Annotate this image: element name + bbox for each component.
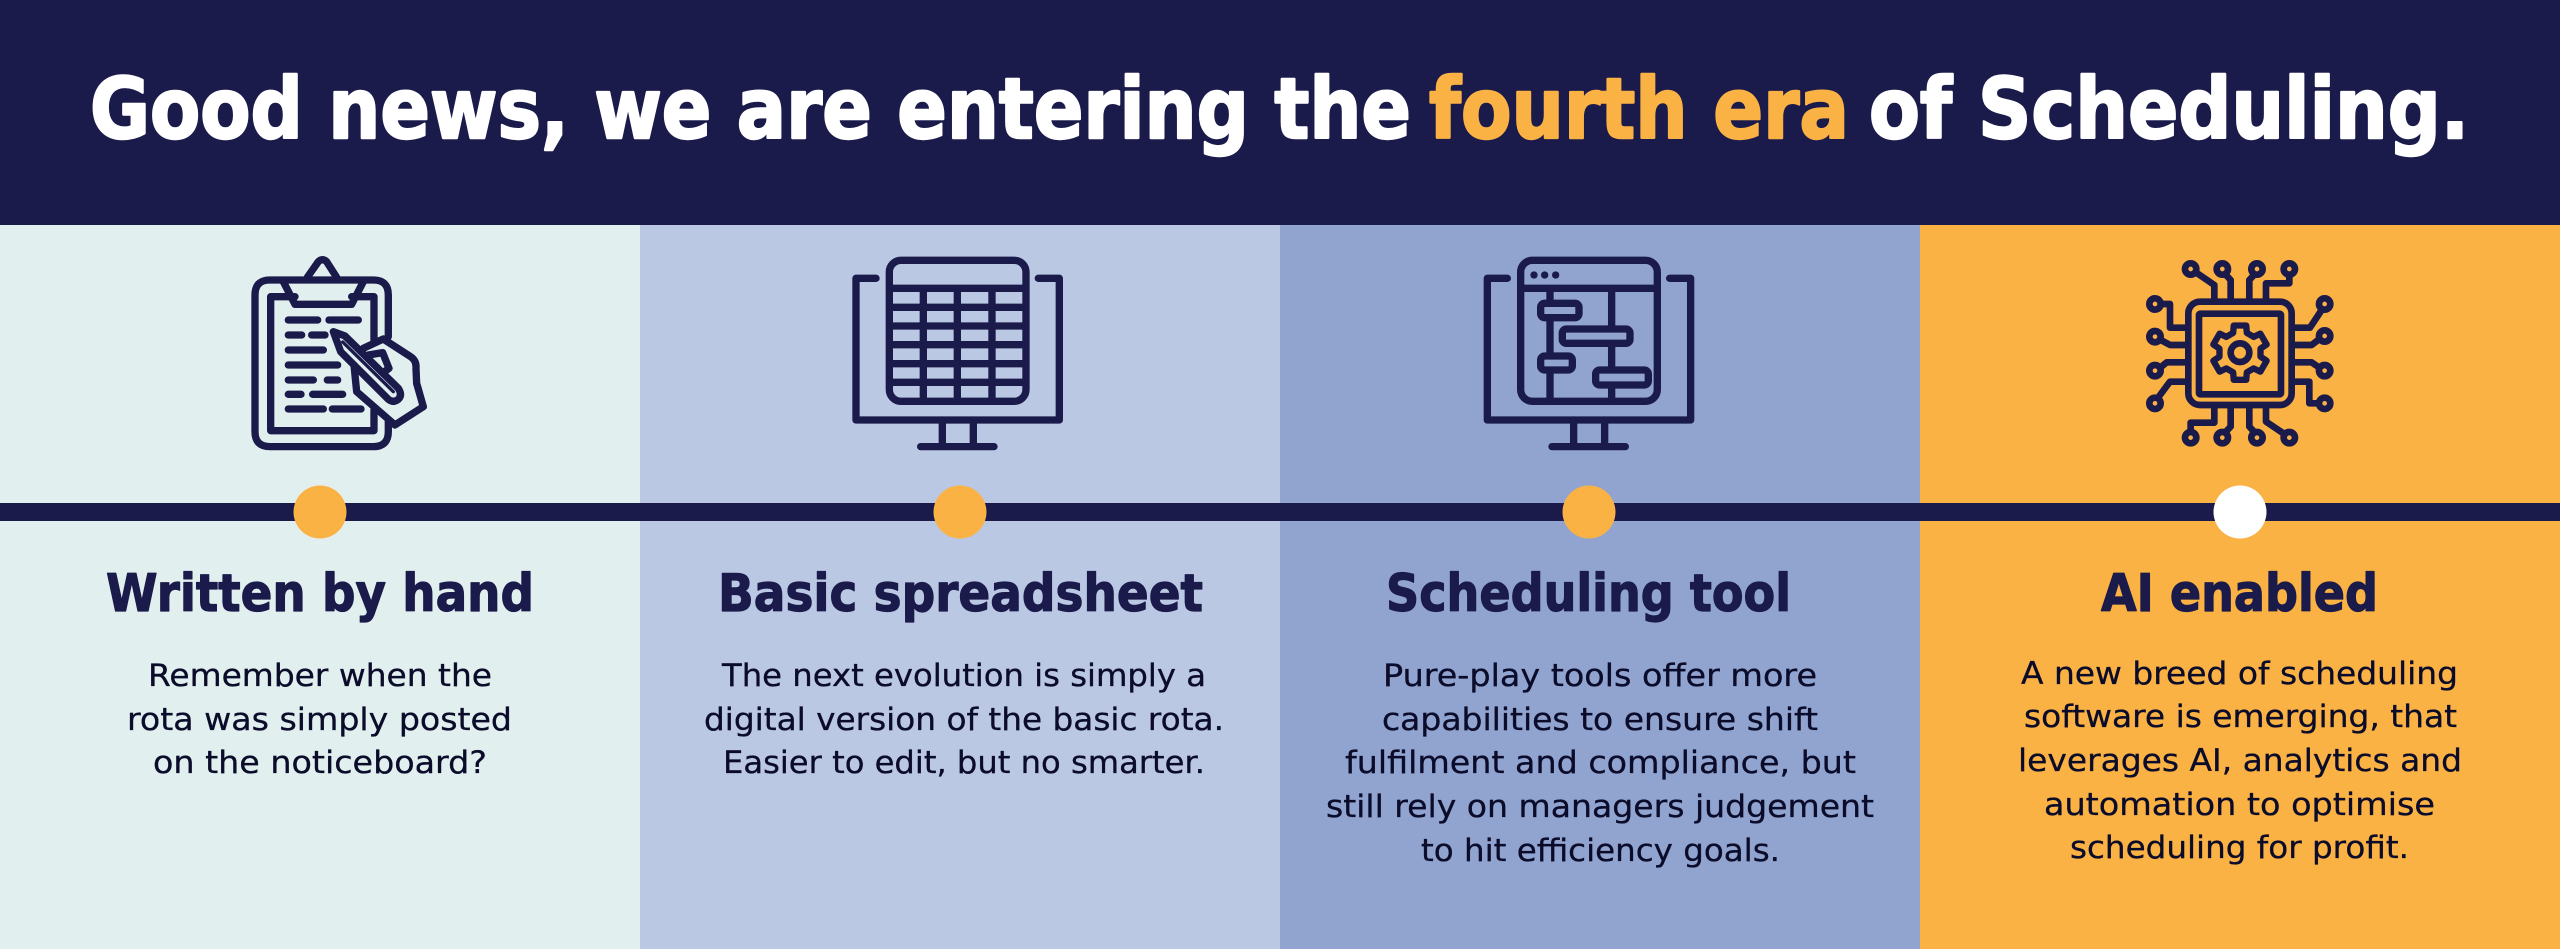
title: of Scheduling. bbox=[1869, 60, 2469, 158]
body text bbox=[2018, 656, 2462, 866]
body text: to hit efficiency goals. bbox=[1421, 833, 1780, 869]
panel: basic spreadsheet bbox=[640, 225, 1280, 949]
panel: written by hand bbox=[0, 225, 640, 949]
body text: digital version of the basic rota. bbox=[704, 702, 1224, 738]
heading: Basic spreadsheet bbox=[718, 564, 1203, 624]
body text: Easier to edit, but no smarter. bbox=[723, 745, 1205, 781]
heading: AI enabled bbox=[2101, 564, 2378, 624]
title bbox=[90, 60, 2469, 158]
panel: AI enabled bbox=[1920, 225, 2560, 949]
body text: capabilities to ensure shift bbox=[1382, 702, 1818, 738]
heading: Scheduling tool bbox=[1386, 564, 1791, 624]
title: Good news, we are entering the bbox=[90, 60, 1411, 158]
body text bbox=[127, 658, 512, 781]
body text: rota was simply posted bbox=[127, 702, 512, 738]
body text: software is emerging, that bbox=[2024, 699, 2457, 735]
timeline with era markers bbox=[0, 486, 2560, 538]
title: fourth era bbox=[1429, 60, 1849, 158]
icon: clipboard with hand writing bbox=[255, 260, 423, 447]
body text: Remember when the bbox=[148, 658, 492, 694]
body text: scheduling for profit. bbox=[2070, 830, 2409, 866]
icon: AI chip with gear bbox=[2149, 263, 2330, 443]
body text: automation to optimise bbox=[2044, 787, 2435, 823]
body text: fulfilment and compliance, but bbox=[1345, 745, 1856, 781]
panel: scheduling tool bbox=[1280, 225, 1920, 949]
header banner bbox=[0, 0, 2560, 225]
heading: Written by hand bbox=[106, 564, 534, 624]
body text bbox=[1326, 658, 1874, 869]
body text: The next evolution is simply a bbox=[721, 658, 1206, 694]
body text: leverages AI, analytics and bbox=[2018, 743, 2462, 779]
body text bbox=[704, 658, 1224, 781]
body text: on the noticeboard? bbox=[153, 745, 487, 781]
icon: spreadsheet on monitor bbox=[856, 260, 1059, 447]
body text: still rely on managers judgement bbox=[1326, 789, 1874, 825]
body text: A new breed of scheduling bbox=[2021, 656, 2458, 692]
body text: Pure-play tools offer more bbox=[1383, 658, 1817, 694]
icon: scheduling chart on monitor bbox=[1487, 260, 1691, 447]
